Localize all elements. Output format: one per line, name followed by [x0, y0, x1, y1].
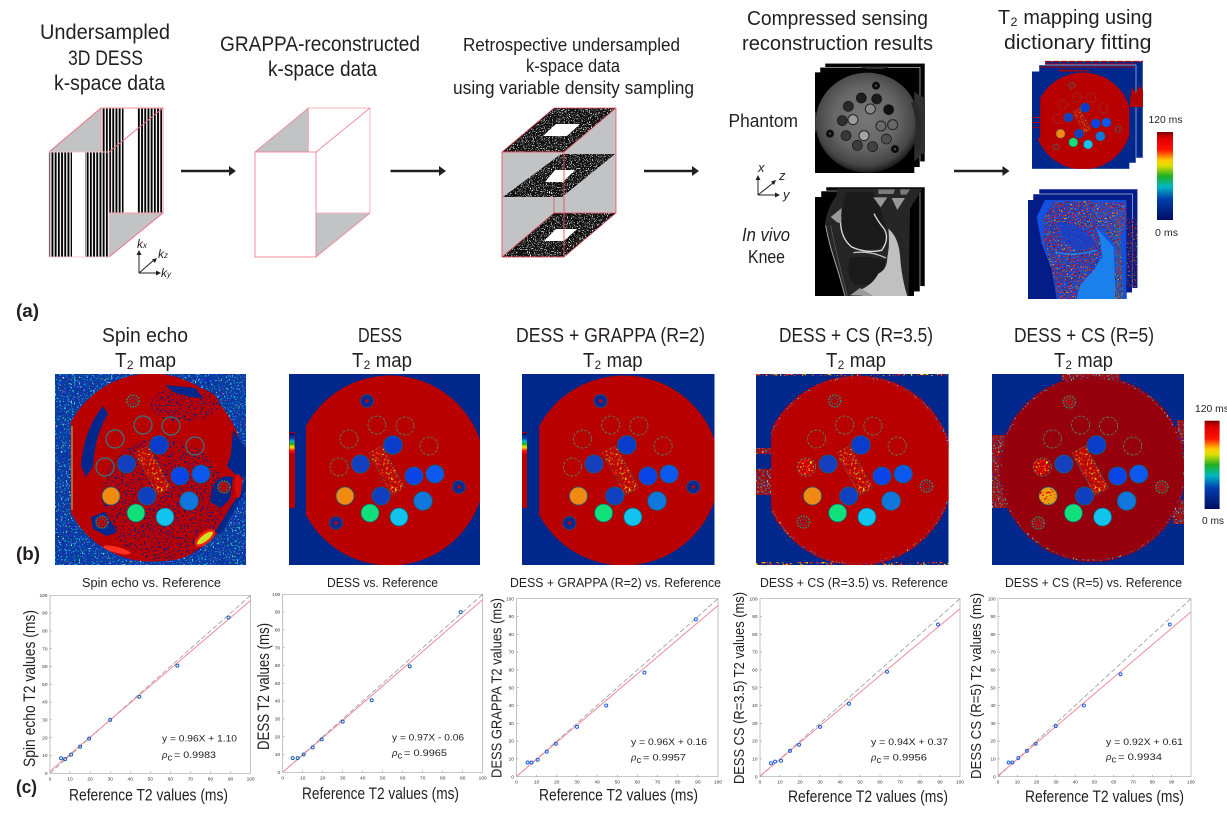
plot: 50	[990, 685, 996, 690]
plot: 40	[509, 703, 514, 709]
regression equation: = 0.9934	[1118, 752, 1162, 763]
map: DESS + GRAPPA	[522, 374, 714, 565]
plot: 10	[67, 776, 73, 782]
plot: 10	[534, 780, 540, 786]
title: spin echo T2 map: T₂ map	[115, 350, 176, 372]
plot: 100	[714, 780, 722, 786]
regression equation: c	[1112, 754, 1116, 766]
plot: 20	[797, 780, 803, 786]
plot: 20	[275, 734, 281, 740]
heading: retrospective undersampled k-space data: using variable density sampling	[453, 78, 694, 98]
plot: 0	[515, 780, 518, 786]
heading: compressed sensing reconstruction results	[742, 7, 933, 55]
plot: 50	[42, 682, 48, 688]
plot: 10	[752, 757, 758, 763]
regression equation: c	[876, 755, 882, 766]
map: DESS + CS R=5	[992, 374, 1184, 565]
plot: 50	[509, 685, 514, 691]
plot: 70	[275, 645, 281, 651]
plot: 40	[1073, 780, 1078, 785]
plot: 80	[917, 780, 923, 786]
plot: 50	[1092, 780, 1097, 785]
regression equation: ρ	[630, 753, 637, 764]
heading: undersampled 3D DESS k-space data: 3D DESS	[68, 47, 143, 70]
plot: 60	[635, 780, 640, 786]
plot: 70	[1131, 780, 1136, 785]
plot: 60	[509, 668, 514, 673]
chart: spin echo vs reference	[21, 576, 255, 805]
x axis label: Reference T2 values (ms)	[539, 787, 698, 805]
plot: 10	[990, 756, 996, 762]
regression equation: ρ	[391, 748, 398, 759]
title: DESS + CS R=5 T2 map: T₂ map	[1054, 350, 1113, 372]
plot: 90	[42, 611, 48, 617]
colorbar with labels: 0 ms	[1202, 516, 1224, 527]
chart title: DESS + CS (R=5) vs. Reference	[1005, 576, 1182, 590]
plot: 50	[857, 780, 863, 786]
plot: 0	[278, 770, 281, 776]
plot: 90	[1169, 780, 1175, 785]
plot: 50	[615, 780, 620, 786]
plot: 20	[42, 735, 48, 741]
chart: DESS + CS R=3.5 vs reference	[731, 576, 964, 806]
heading: GRAPPA-reconstructed k-space data	[220, 33, 420, 81]
chart title: Spin echo vs. Reference	[82, 576, 221, 590]
plot	[39, 593, 255, 782]
chart title: DESS vs. Reference	[327, 576, 438, 590]
plot: 0	[281, 775, 284, 781]
heading: undersampled 3D DESS k-space data	[40, 21, 170, 95]
plot: 50	[275, 681, 281, 687]
plot: 40	[128, 776, 133, 782]
arrow	[390, 166, 446, 176]
plot: 30	[108, 776, 113, 782]
plot: 30	[275, 716, 281, 722]
x axis label: Reference T2 values (ms)	[788, 788, 948, 806]
plot: 40	[837, 780, 843, 786]
chart: DESS + CS R=5 vs reference	[968, 576, 1195, 806]
plot: 60	[275, 663, 281, 669]
arrow	[181, 166, 236, 176]
regression equation: = 0.9983	[174, 750, 216, 761]
panel label a: (a)	[16, 301, 39, 321]
heading: GRAPPA-reconstructed k-space data: k-space data	[268, 58, 377, 81]
title: spin echo T2 map: Spin echo	[102, 325, 188, 347]
colorbar with labels: 120 ms	[1195, 404, 1227, 415]
axes: x y z: z	[778, 168, 786, 183]
plot: 60	[168, 776, 173, 782]
x axis label: Reference T2 values (ms)	[69, 787, 228, 805]
colorbar with labels	[1195, 404, 1227, 527]
y axis label: DESS CS (R=3.5) T2 values (ms)	[731, 592, 748, 784]
plot: 70	[188, 776, 193, 782]
heading: T2 mapping using dictionary fitting: dictionary fitting	[1004, 31, 1152, 54]
plot: 20	[1034, 780, 1040, 785]
plot: 0	[755, 774, 758, 780]
cube: variable density sampling planes	[502, 108, 616, 257]
plot	[988, 596, 1195, 785]
plot: 20	[509, 739, 514, 745]
regression equation: y = 0.96X + 0.16	[631, 737, 707, 748]
image stack: phantom T2 map	[1032, 61, 1143, 169]
heading: compressed sensing reconstruction results: Compressed sensing	[747, 7, 928, 30]
image stack: knee T2 map	[1028, 189, 1138, 299]
regression equation: ρ	[870, 753, 877, 764]
plot: 0	[45, 771, 48, 777]
plot: 60	[400, 775, 406, 781]
title: DESS + GRAPPA T2 map: DESS + GRAPPA (R=2)	[516, 325, 705, 347]
map: DESS + CS R=3.5	[756, 374, 949, 565]
panel (a): acquisition and reconstruction pipeline	[16, 6, 1182, 321]
regression equation: c	[398, 750, 402, 762]
title: DESS + GRAPPA T2 map: T₂ map	[583, 350, 642, 372]
plot: 0	[759, 780, 762, 786]
regression equation	[630, 737, 707, 766]
panel label b: (b)	[16, 544, 40, 564]
regression equation: y = 0.94X + 0.37	[871, 737, 948, 748]
regression equation	[391, 733, 464, 762]
title: DESS + CS R=5 T2 map: DESS + CS (R=5)	[1014, 325, 1154, 347]
image stack: knee magnitude	[815, 187, 925, 296]
plot: 20	[990, 739, 996, 744]
plot: 90	[275, 610, 281, 616]
panel (b): T2 maps	[16, 325, 1227, 566]
title: DESS + CS R=3.5 T2 map: T₂ map	[826, 350, 886, 372]
plot: 100	[506, 596, 514, 602]
plot: 90	[695, 780, 701, 786]
axes: x y z: x	[757, 160, 765, 175]
plot: 100	[988, 596, 996, 601]
axes: kx ky kz: kx	[137, 237, 148, 251]
plot: 70	[509, 650, 514, 656]
label: phantom: Phantom	[728, 110, 798, 131]
y axis label: DESS CS (R=5) T2 values (ms)	[968, 593, 985, 779]
image stack: phantom magnitude	[815, 63, 925, 173]
plot: 40	[360, 775, 366, 781]
plot: 70	[42, 646, 48, 652]
heading: undersampled 3D DESS k-space data: k-space data	[54, 72, 165, 95]
plot: 10	[509, 757, 514, 762]
colorbar with labels: 120 ms	[1148, 115, 1182, 126]
plot: 70	[655, 780, 661, 786]
regression equation: = 0.9956	[883, 753, 927, 764]
regression equation	[1105, 737, 1183, 766]
regression equation: ρ	[161, 750, 168, 761]
plot: 90	[460, 775, 466, 781]
colorbar with labels	[1148, 115, 1182, 239]
plot: 30	[1053, 780, 1059, 785]
plot: 0	[511, 774, 514, 780]
plot: 100	[956, 780, 964, 786]
label: in vivo knee: Knee	[748, 247, 785, 267]
plot: 40	[275, 699, 281, 705]
plot: 40	[594, 780, 600, 786]
plot: 20	[320, 775, 326, 781]
plot: 70	[752, 650, 758, 656]
plot: 60	[752, 668, 758, 674]
plot: 10	[777, 780, 783, 786]
chart title: DESS + CS (R=3.5) vs. Reference	[760, 576, 948, 590]
regression equation: y = 0.97X - 0.06	[392, 733, 464, 744]
plot: 60	[990, 667, 996, 673]
heading: compressed sensing reconstruction results: reconstruction results	[742, 32, 933, 55]
plot: 100	[39, 593, 48, 599]
plot: 40	[42, 700, 48, 706]
title: DESS + CS R=5 T2 map	[1014, 325, 1154, 372]
chart: DESS + GRAPPA vs reference	[488, 576, 722, 805]
chart title: DESS + GRAPPA (R=2) vs. Reference	[510, 576, 721, 590]
label: in vivo knee	[742, 225, 790, 267]
plot: 0	[993, 774, 996, 779]
chart: DESS vs reference	[255, 576, 487, 803]
plot	[749, 596, 964, 786]
plot: 80	[208, 776, 213, 782]
y axis label: DESS T2 values (ms)	[255, 623, 273, 750]
heading: undersampled 3D DESS k-space data: Undersampled	[40, 21, 170, 44]
plot: 60	[1111, 780, 1117, 785]
plot: 10	[300, 775, 306, 781]
plot: 80	[440, 775, 446, 781]
panel (c): regression charts	[16, 576, 1195, 806]
x axis label: Reference T2 values (ms)	[1025, 788, 1184, 806]
heading: GRAPPA-reconstructed k-space data: GRAPPA-reconstructed	[220, 33, 420, 56]
plot: 90	[509, 614, 514, 620]
regression equation: ρ	[1105, 752, 1112, 763]
regression equation: c	[636, 755, 642, 766]
arrow	[954, 166, 1010, 176]
plot: 50	[148, 776, 153, 782]
title: DESS + CS R=3.5 T2 map	[779, 325, 933, 372]
plot: 0	[997, 780, 1000, 785]
title: DESS + CS R=3.5 T2 map: DESS + CS (R=3.5)	[779, 325, 933, 347]
plot: 80	[509, 632, 514, 638]
plot	[506, 596, 722, 786]
regression equation	[161, 734, 237, 764]
colorbar with labels: 0 ms	[1155, 228, 1178, 239]
plot: 60	[42, 664, 48, 670]
plot: 90	[937, 780, 943, 786]
plot: 20	[752, 739, 758, 745]
plot: 40	[990, 703, 996, 708]
title: DESS + GRAPPA T2 map	[516, 325, 705, 372]
plot: 90	[752, 614, 758, 620]
regression equation: = 0.9965	[404, 748, 447, 759]
arrow	[644, 166, 699, 176]
axes: x y z	[756, 160, 791, 202]
y axis label: Spin echo T2 values (ms)	[21, 610, 39, 767]
plot: 0	[49, 776, 52, 782]
plot: 100	[247, 776, 255, 782]
plot: 30	[752, 721, 758, 727]
plot: 70	[420, 775, 426, 781]
plot: 10	[275, 752, 281, 758]
plot: 70	[990, 650, 996, 655]
plot: 80	[990, 632, 996, 637]
axes: kx ky kz	[136, 237, 172, 280]
y axis label: DESS GRAPPA T2 values (ms)	[488, 598, 506, 778]
plot: 30	[574, 780, 580, 786]
plot: 30	[817, 780, 823, 786]
plot: 90	[228, 776, 234, 782]
axes: kx ky kz: kz	[158, 247, 168, 261]
plot: 50	[380, 775, 386, 781]
plot: 70	[897, 780, 903, 786]
title: DESS T2 map	[352, 325, 412, 372]
plot: 100	[272, 592, 281, 598]
heading: retrospective undersampled k-space data: Retrospective undersampled	[463, 35, 680, 55]
plot: 40	[752, 703, 758, 709]
panel label c: (c)	[16, 777, 37, 797]
plot: 20	[87, 776, 93, 782]
title: spin echo T2 map	[102, 325, 188, 372]
map: DESS	[289, 374, 480, 565]
heading: T2 mapping using dictionary fitting: T₂ mapping using	[998, 6, 1152, 29]
regression equation: y = 0.96X + 1.10	[162, 734, 237, 745]
regression equation: y = 0.92X + 0.61	[1106, 737, 1183, 748]
label: in vivo knee: In vivo	[742, 225, 790, 245]
cube: GRAPPA reconstructed k-space	[255, 108, 370, 257]
plot	[272, 592, 487, 781]
x axis label: Reference T2 values (ms)	[302, 785, 459, 803]
heading: T2 mapping using dictionary fitting	[998, 6, 1152, 54]
plot: 100	[749, 596, 758, 602]
plot: 80	[42, 629, 48, 634]
plot: 80	[275, 627, 281, 633]
plot: 60	[877, 780, 883, 786]
plot: 20	[554, 780, 560, 786]
plot: 100	[479, 775, 487, 781]
plot: 80	[675, 780, 681, 786]
regression equation	[870, 737, 948, 766]
title: DESS T2 map: DESS	[358, 325, 402, 347]
plot: 100	[1187, 780, 1195, 785]
axes: kx ky kz: ky	[161, 266, 172, 280]
plot: 80	[752, 632, 758, 638]
plot: 30	[990, 721, 996, 726]
plot: 90	[990, 614, 996, 619]
heading: retrospective undersampled k-space data	[453, 35, 694, 98]
regression equation: c	[168, 752, 172, 764]
plot: 30	[509, 721, 514, 727]
plot: 30	[340, 775, 346, 781]
regression equation: = 0.9957	[643, 753, 686, 764]
heading: retrospective undersampled k-space data: k-space data	[526, 56, 621, 76]
cube: undersampled k-space with line stripes	[49, 108, 163, 257]
axes: x y z: y	[782, 187, 791, 202]
plot: 50	[752, 685, 758, 691]
plot: 80	[1150, 780, 1155, 785]
plot: 10	[1015, 780, 1020, 785]
map: spin echo	[55, 374, 246, 565]
plot: 10	[42, 753, 48, 759]
plot: 30	[42, 718, 48, 723]
title: DESS T2 map: T₂ map	[352, 350, 412, 372]
